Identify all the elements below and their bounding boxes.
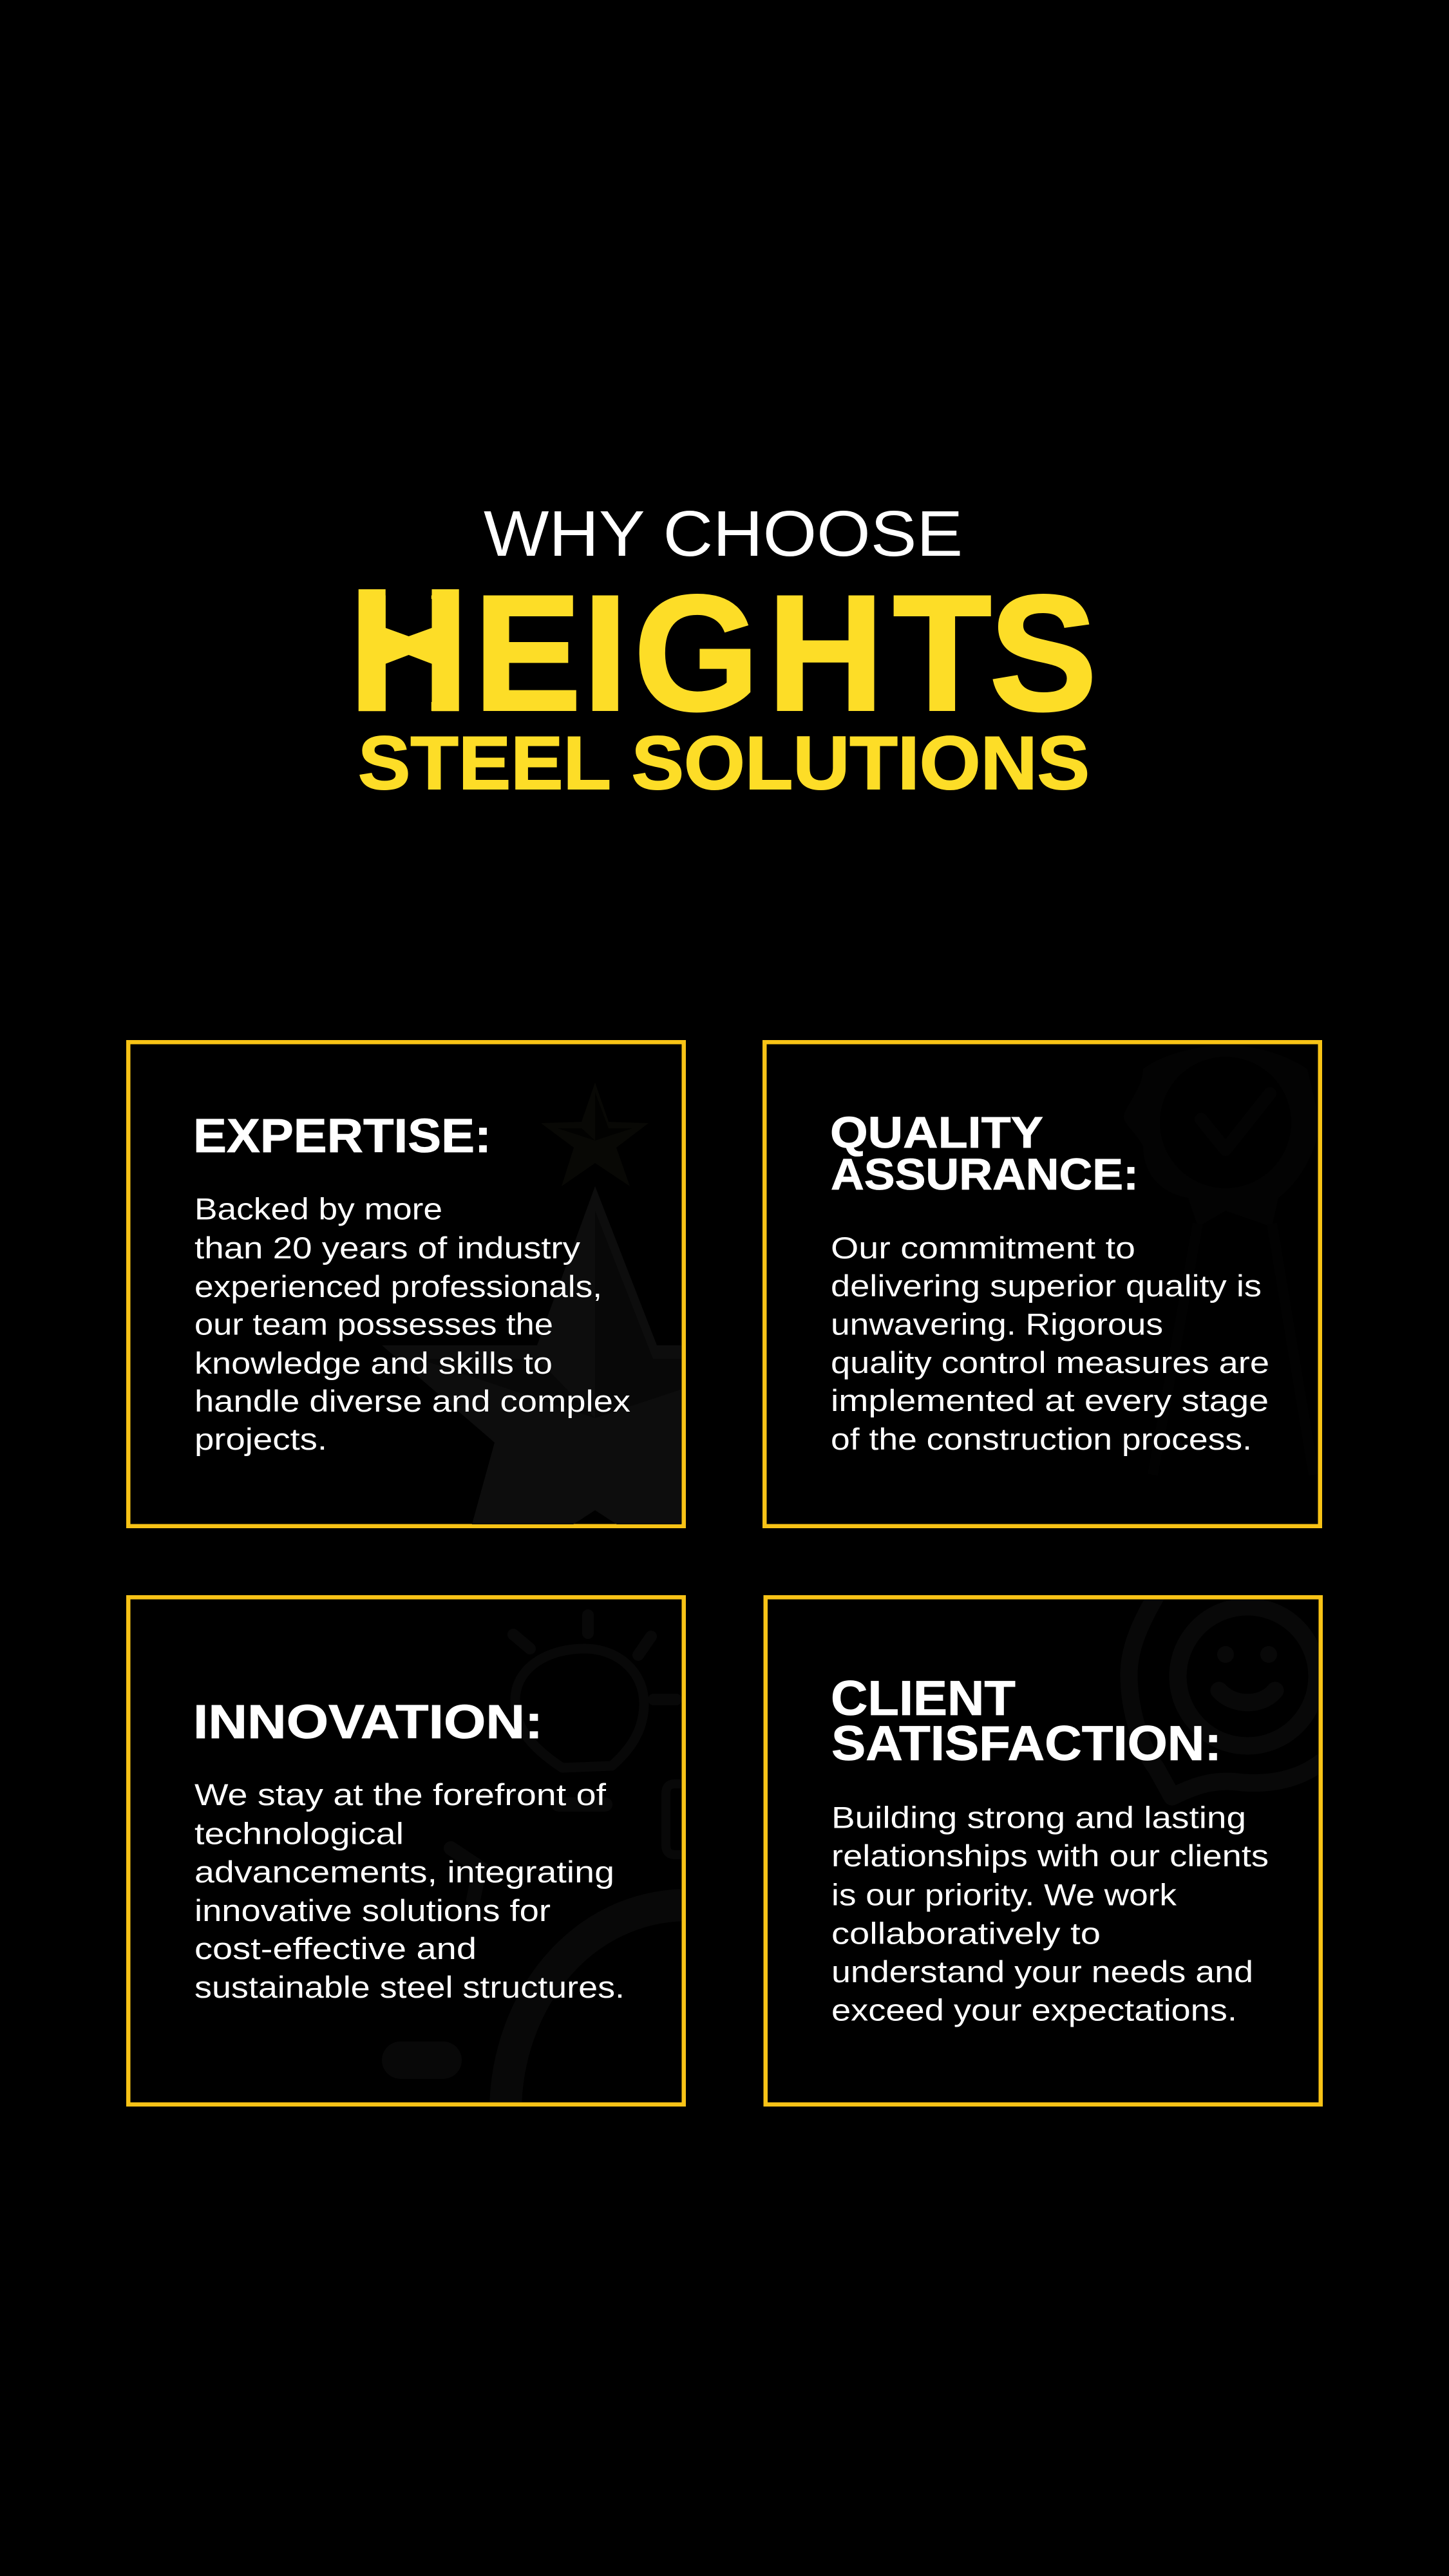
body text: Our commitment to [831, 1231, 1135, 1265]
body text: of the construction process. [831, 1422, 1252, 1456]
body text: cost-effective and [194, 1931, 477, 1965]
body text: our team possesses the [194, 1307, 553, 1341]
body text [194, 1777, 625, 2004]
panel: innovation [128, 1597, 689, 2112]
body text: handle diverse and complex [194, 1384, 630, 1418]
icon: quality badge watermark [1124, 1045, 1320, 1475]
body text: Building strong and lasting [831, 1801, 1246, 1834]
body text: innovative solutions for [194, 1893, 551, 1927]
heading: QUALITY [830, 1108, 1043, 1157]
body text: projects. [194, 1422, 327, 1456]
body text: knowledge and skills to [194, 1346, 553, 1380]
heading: SATISFACTION: [831, 1716, 1222, 1771]
panel: client satisfaction [766, 1591, 1327, 2105]
body text: quality control measures are [831, 1345, 1269, 1379]
heading: CLIENT [831, 1671, 1016, 1726]
body text: advancements, integrating [194, 1855, 614, 1889]
body text [831, 1801, 1269, 2027]
body text: exceed your expectations. [831, 1993, 1237, 2027]
body text [831, 1231, 1269, 1456]
heading: EXPERTISE: [193, 1109, 491, 1162]
icon: head with light bulb watermark [382, 1615, 689, 2112]
body text: implemented at every stage [831, 1383, 1269, 1417]
title line: heights: HEIGHTS [350, 562, 1097, 745]
body text: understand your needs and [831, 1955, 1253, 1989]
body text: We stay at the forefront of [194, 1777, 607, 1812]
body text: technological [194, 1816, 404, 1850]
body text: delivering superior quality is [831, 1269, 1262, 1303]
body text: collaboratively to [831, 1917, 1101, 1950]
title [350, 498, 1097, 805]
body text: relationships with our clients [831, 1839, 1269, 1873]
body text [194, 1192, 630, 1456]
heading [831, 1671, 1222, 1771]
heading: ASSURANCE: [831, 1150, 1139, 1199]
title line: steel solutions: STEEL SOLUTIONS [358, 721, 1090, 805]
heading [830, 1108, 1139, 1199]
panel: quality assurance [764, 1042, 1320, 1526]
body text: is our priority. We work [831, 1878, 1177, 1912]
heading: INNOVATION: [193, 1695, 543, 1748]
icon: smiling speech bubble watermark [1129, 1591, 1327, 1797]
body text: than 20 years of industry [194, 1231, 581, 1265]
body text: unwavering. Rigorous [831, 1307, 1163, 1341]
panel: expertise [126, 1040, 686, 1528]
title line: why choose: WHY CHOOSE [484, 498, 963, 570]
body text: Backed by more [194, 1192, 442, 1226]
infographic canvas [126, 511, 1323, 2107]
body text: experienced professionals, [194, 1269, 602, 1303]
body text: sustainable steel structures. [194, 1970, 625, 2004]
icon: nautical star watermark [383, 1187, 681, 1524]
